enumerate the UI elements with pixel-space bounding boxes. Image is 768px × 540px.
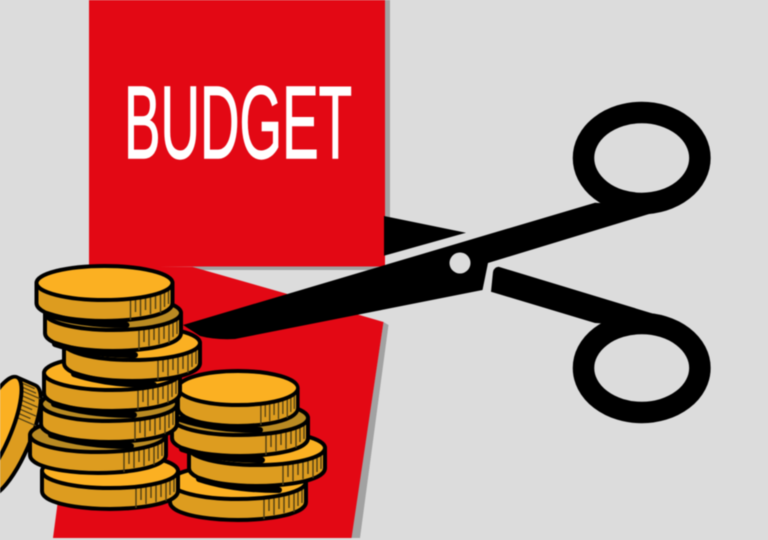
upper handle ring: [584, 112, 700, 204]
far blade tip: [384, 216, 466, 256]
lower arm: [491, 267, 674, 326]
icon: falling coin: [0, 370, 52, 502]
panel: red budget sheet top: [89, 0, 385, 266]
title: BUDGET: BUDGET: [124, 65, 352, 180]
panel: red budget sheet bottom: [53, 266, 384, 538]
pivot hole: [450, 252, 470, 274]
icon: left coin stack: [30, 266, 200, 509]
long blade and arm: [183, 203, 672, 339]
icon: right coin stack: [170, 371, 325, 520]
lower handle ring: [584, 324, 700, 412]
icon: scissors: [183, 112, 700, 412]
paper shadow: [192, 0, 390, 538]
